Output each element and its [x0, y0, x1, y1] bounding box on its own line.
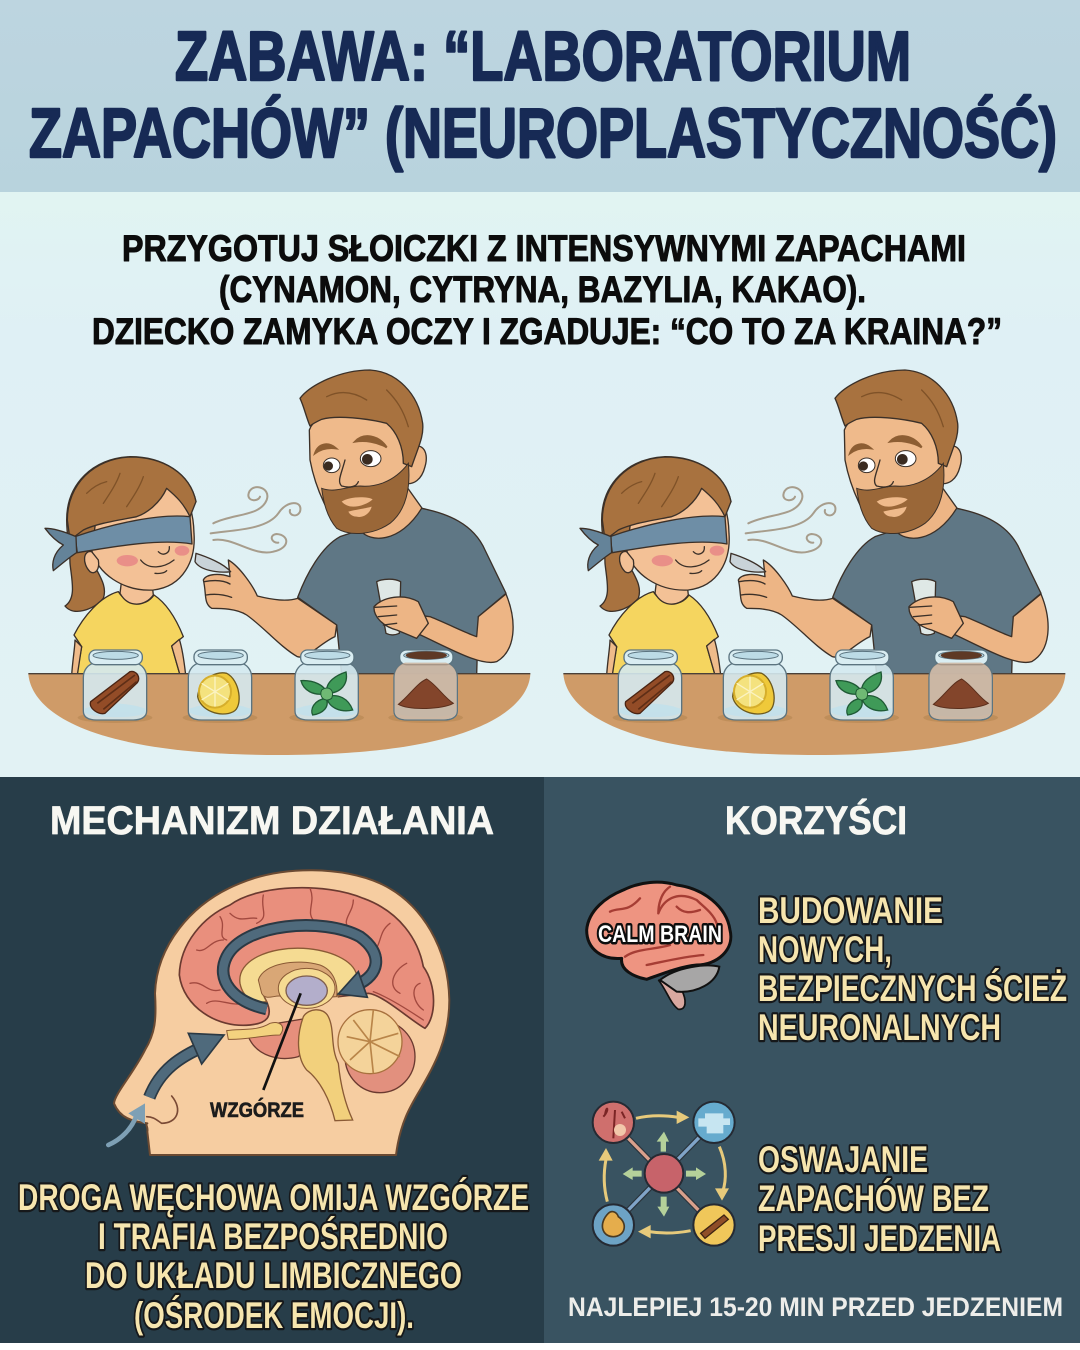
header band [0, 0, 1080, 192]
brainstem [299, 1010, 353, 1121]
temporal lobe [248, 1018, 308, 1058]
pale ring around thalamus [278, 968, 335, 1008]
node: top left glyph [603, 1109, 625, 1138]
network spokes pink [628, 1138, 700, 1212]
node: top left [593, 1102, 634, 1143]
instructions text: PRZYGOTUJ SŁOICZKI Z INTENSYWNYMI ZAPACHAMI [122, 228, 966, 269]
benefit text 1: NEURONALNYCH [758, 1007, 1001, 1048]
node: top right [693, 1102, 735, 1143]
inner arrows [623, 1132, 706, 1217]
diencephalon [258, 962, 337, 1000]
mechanism description [18, 1176, 529, 1336]
network spokes dark [628, 1137, 700, 1212]
icon: scent network [593, 1102, 735, 1246]
panel: benefits background [544, 777, 1080, 1343]
instructions text [92, 228, 1002, 352]
cerebellum icon [660, 965, 719, 992]
head silhouette [114, 870, 449, 1155]
calm brain label: CALM BRAIN [598, 921, 722, 948]
brain stem [658, 980, 685, 1009]
nostril [147, 1096, 178, 1123]
label: thalamus: WZGÓRZE [210, 1098, 304, 1122]
node: bottom right cinnamon [701, 1215, 728, 1238]
arrow: inhaled air [108, 1103, 145, 1145]
cerebellum [338, 1010, 415, 1093]
title [29, 17, 1057, 172]
mechanism description: (OŚRODEK EMOCJI). [134, 1294, 414, 1336]
cerebrum [179, 888, 434, 1028]
heading: mechanism: MECHANIZM DZIAŁANIA [50, 799, 494, 843]
benefit text 1: BUDOWANIE [758, 890, 943, 931]
instructions text: (CYNAMON, CYTRYNA, BAZYLIA, KAKAO). [219, 269, 866, 310]
benefit text 2: OSWAJANIE [758, 1139, 928, 1180]
benefit text 1: NOWYCH, [758, 929, 892, 970]
thalamus [286, 976, 327, 1005]
node: bottom left [593, 1204, 634, 1246]
olfactory tract [227, 1022, 283, 1039]
head and brain diagram [108, 870, 449, 1155]
heading: benefits: KORZYŚCI [725, 797, 907, 843]
benefit text 2: ZAPACHÓW BEZ [758, 1177, 989, 1219]
mechanism description: DO UKŁADU LIMBICZNEGO [85, 1255, 462, 1296]
illustration: left scene [28, 370, 530, 755]
cerebrum icon [587, 882, 731, 979]
node: top right glyph [698, 1113, 730, 1133]
benefit text 2 [758, 1139, 1001, 1259]
node: centre [645, 1154, 683, 1193]
benefit text 2: PRESJI JEDZENIA [758, 1218, 1001, 1259]
arrow: arc through cortex [223, 925, 376, 1009]
intro and illustration panel [0, 192, 1080, 777]
brain folds [190, 888, 423, 1020]
mechanism description: DROGA WĘCHOWA OMIJA WZGÓRZE [18, 1176, 529, 1218]
node: bottom left glyph [602, 1212, 624, 1237]
mechanism description: I TRAFIA BEZPOŚREDNIO [98, 1215, 448, 1257]
cycle arrows [599, 1111, 729, 1238]
node: bottom right [693, 1204, 735, 1246]
illustration: right scene [563, 370, 1065, 755]
benefit text 1 [758, 890, 1067, 1048]
arrow: nose to brain [149, 1033, 224, 1097]
brain folds icon [610, 887, 717, 965]
corpus callosum band [240, 948, 357, 1002]
icon: calm brain [587, 882, 731, 1009]
network spokes blue [628, 1137, 700, 1210]
panel: mechanism background [0, 777, 544, 1343]
pointer line [263, 993, 301, 1090]
